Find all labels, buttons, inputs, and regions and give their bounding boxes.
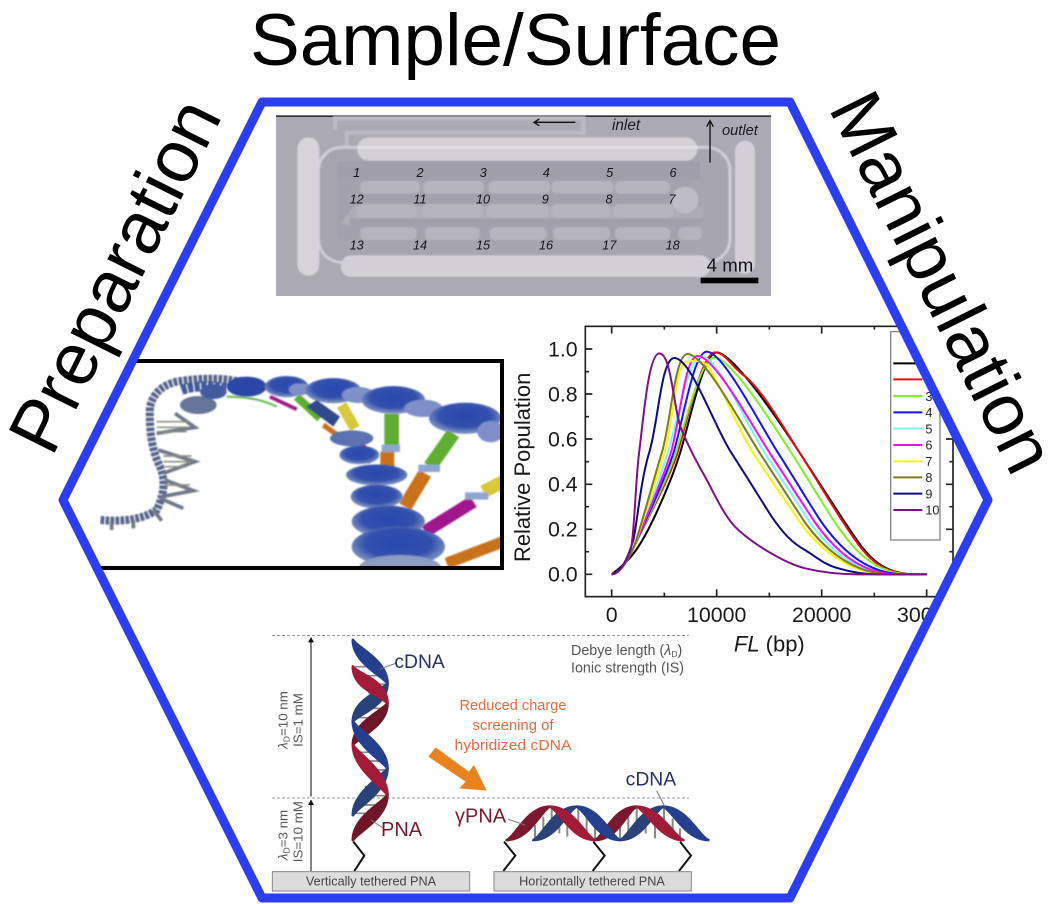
x axis labels: 10000	[687, 603, 746, 627]
panel: microfluidic chip photo	[276, 115, 771, 296]
orange arrow	[428, 747, 487, 791]
y axis labels	[548, 337, 578, 587]
ionic strength labels: λ	[276, 742, 291, 750]
orange caption: hybridized cDNA	[454, 738, 572, 754]
gamma PNA label: γPNA	[455, 805, 507, 827]
data curves	[612, 352, 927, 574]
plot frame and ticks	[585, 326, 953, 597]
y axis labels: 1.0	[548, 337, 578, 361]
vertical scale arrows	[308, 637, 314, 871]
ionic strength labels: IS=10 mM	[291, 801, 306, 862]
chip chamber numbers: 17	[602, 238, 617, 252]
horizontal helix	[507, 807, 708, 840]
chip chamber numbers	[350, 166, 680, 252]
chip chamber numbers: 18	[666, 238, 680, 252]
cDNA label: cDNA	[626, 769, 676, 790]
small DNA helix	[100, 379, 247, 530]
cDNA label	[626, 769, 676, 805]
horizontally tethered box	[494, 872, 691, 891]
inlet label and arrow: inlet	[612, 117, 641, 134]
ionic strength labels: IS=1 mM	[291, 693, 306, 747]
scale bar 4 mm	[701, 254, 758, 283]
orange caption: screening of	[472, 718, 554, 734]
tether	[353, 842, 364, 871]
chip chamber numbers: 6	[669, 166, 677, 180]
blue sugar-phosphate beads	[227, 376, 504, 582]
chip chamber numbers: 3	[480, 166, 487, 180]
title: Sample/Surface: Sample/Surface	[250, 0, 781, 81]
vertically tethered box: Vertically tethered PNA	[306, 875, 437, 889]
ionic strength labels: =10 nm	[276, 691, 291, 736]
y axis labels: 0.6	[548, 427, 578, 451]
legend: 3	[925, 390, 932, 404]
chip chamber numbers: 2	[415, 166, 424, 180]
ionic strength labels: λ	[276, 854, 291, 861]
x axis title: FL (bp)	[734, 631, 805, 656]
chip chamber numbers: 13	[350, 238, 364, 252]
horizontally tethered box: Horizontally tethered PNA	[519, 875, 665, 889]
chip chamber numbers: 12	[350, 193, 364, 207]
legend: 7	[925, 455, 932, 469]
chip chamber numbers: 10	[476, 193, 490, 207]
tethers	[503, 842, 691, 871]
legend: 4	[925, 406, 932, 420]
panel: fragment length chart	[505, 320, 960, 660]
chip chamber numbers: 15	[476, 238, 491, 252]
scale bar 4 mm: 4 mm	[707, 254, 753, 275]
legend text: Ionic strength (IS)	[571, 660, 684, 676]
chip chamber numbers: 8	[605, 193, 613, 207]
chip chamber numbers: 4	[543, 166, 550, 180]
x axis labels: 20000	[792, 603, 851, 627]
vertical helix	[353, 640, 387, 840]
legend text: )	[678, 643, 682, 659]
chip chamber numbers: 9	[542, 193, 549, 207]
orange caption	[454, 698, 572, 754]
chip chamber numbers: 16	[539, 238, 554, 252]
y axis labels: 0.2	[548, 518, 578, 542]
cDNA label: cDNA	[394, 652, 445, 673]
legend text: Debye length (λ	[571, 643, 671, 659]
legend text: D	[671, 649, 678, 659]
panel: tethered PNA diagram	[272, 636, 708, 891]
outlet label and arrow: outlet	[722, 123, 759, 139]
ionic strength labels: D	[282, 847, 292, 854]
y axis labels: 0.8	[548, 382, 578, 406]
PNA label: PNA	[381, 819, 423, 841]
panel: DNA illustration	[100, 359, 504, 570]
legend: 8	[925, 471, 932, 485]
chip chamber numbers: 1	[353, 166, 360, 180]
legend: 1	[925, 357, 932, 371]
legend: 2	[925, 373, 932, 387]
legend: 10	[925, 504, 939, 518]
legend text	[571, 643, 684, 676]
x axis labels: 30000	[897, 603, 956, 627]
inlet label and arrow	[534, 117, 641, 134]
legend: 9	[925, 487, 932, 501]
chip chamber numbers: 14	[413, 238, 427, 252]
chip chamber numbers: 7	[668, 193, 676, 207]
legend: 6	[925, 439, 932, 453]
x axis labels: 0	[606, 603, 618, 627]
x axis labels	[606, 608, 930, 622]
legend	[891, 332, 940, 540]
ionic strength labels: D	[282, 736, 292, 742]
coloured base pairs	[227, 397, 503, 563]
dashed level lines	[272, 636, 689, 798]
hexagon frame	[63, 102, 988, 898]
ionic strength labels	[276, 691, 306, 862]
outlet label and arrow	[707, 121, 759, 163]
chip chamber numbers: 5	[606, 166, 614, 180]
legend: 5	[925, 422, 932, 436]
y axis labels: 0.0	[548, 563, 578, 587]
vertically tethered box	[272, 872, 470, 891]
y axis title: Relative Population	[510, 373, 535, 562]
ionic strength labels: =3 nm	[276, 810, 291, 847]
y axis labels: 0.4	[548, 473, 578, 497]
orange caption: Reduced charge	[460, 698, 566, 714]
chip chamber numbers: 11	[413, 193, 427, 207]
